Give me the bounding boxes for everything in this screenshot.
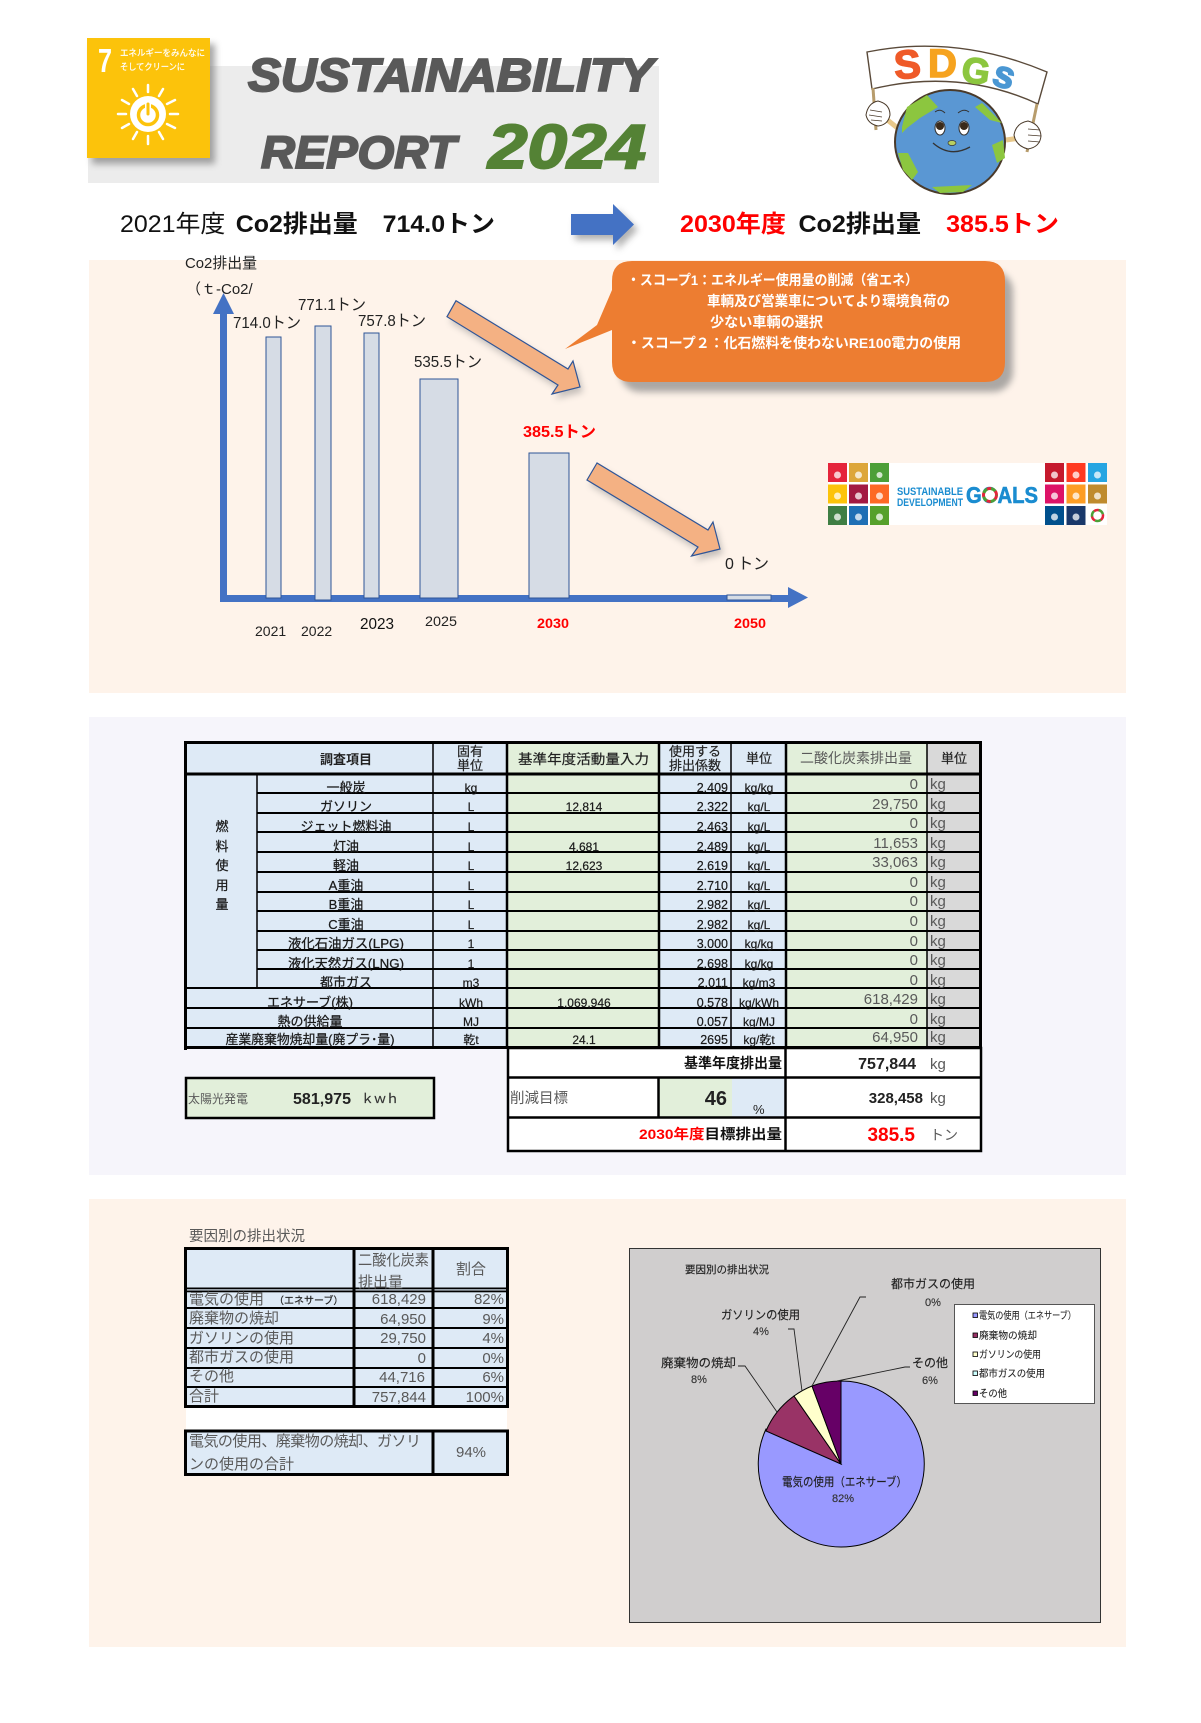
emission factors: 2.489 — [697, 840, 728, 854]
table: emissions by source — [186, 1248, 508, 1406]
item names: ガソリン — [320, 799, 372, 814]
panel: emissions calculation table — [89, 717, 1126, 1175]
pie chart: ガソリンの使用 — [721, 1307, 800, 1322]
emission factors: 2.710 — [697, 879, 728, 893]
CO2 emission values: 0 — [910, 913, 918, 930]
title: year 2024: 2024 — [487, 113, 646, 182]
legend: 電気の使用（エネサーブ） — [979, 1309, 1076, 1322]
table: totals and reduction target: 2030年度 目標排出量 — [639, 1126, 782, 1142]
table: emissions by source: 都市ガスの使用 — [189, 1349, 294, 1366]
icon: SDGs earth mascot: G — [959, 48, 993, 93]
CO2 units: kg — [930, 991, 946, 1008]
factor units: kg/MJ — [743, 1015, 775, 1029]
activity inputs: 24.1 — [572, 1033, 596, 1047]
row group label: fuel use: 用 — [215, 878, 229, 893]
pie chart: 4% — [753, 1326, 769, 1338]
item names: A重油 — [329, 878, 363, 893]
CO2 emission values: 0 — [910, 815, 918, 832]
factor units: kg/乾t — [743, 1033, 775, 1047]
table: emissions by source: 合計 — [189, 1388, 219, 1405]
icon: SDG goal 7 card: そしてクリーンに — [120, 62, 185, 72]
table header row: 排出係数 — [669, 758, 721, 773]
activity inputs: 12,814 — [566, 800, 603, 814]
table: totals and reduction target: kg — [930, 1056, 946, 1073]
activity inputs: 12,623 — [566, 859, 603, 873]
CO2 units: kg — [930, 972, 946, 989]
pie chart: 82% — [832, 1493, 854, 1505]
CO2 units — [930, 776, 946, 1046]
bar chart — [213, 293, 808, 639]
CO2 units: kg — [930, 933, 946, 950]
factor units: kg/L — [748, 840, 771, 854]
item names: エネサーブ(株) — [267, 995, 353, 1010]
table: top three sources total: 電気の使用、廃棄物の焼却、ガソリ — [189, 1433, 421, 1450]
table: emissions by source: 割合 — [456, 1261, 486, 1278]
chart panel: pie chart of emission sources — [630, 1248, 1100, 1622]
CO2 units: kg — [930, 913, 946, 930]
CO2 emission values: 0 — [910, 1011, 918, 1028]
emission factors: 2.409 — [697, 781, 728, 795]
legend: 廃棄物の焼却 — [979, 1329, 1037, 1342]
item names: 灯油 — [333, 839, 359, 854]
legend: その他 — [979, 1387, 1007, 1400]
table: emissions by source: その他 — [189, 1368, 234, 1385]
unit column: L — [468, 859, 475, 873]
item names: 都市ガス — [320, 975, 372, 990]
unit column: kg — [465, 781, 477, 795]
emission factors: 2.322 — [697, 800, 728, 814]
CO2 units: kg — [930, 952, 946, 969]
icon: Sustainable Development Goals logo: GOALS — [966, 482, 1038, 508]
unit column: 乾t — [463, 1033, 479, 1047]
axis title — [185, 255, 257, 298]
table header row: 二酸化炭素排出量 — [800, 750, 912, 766]
CO2 emission values: 33,063 — [872, 854, 918, 871]
table: emissions by source: 排出量 — [358, 1274, 403, 1291]
CO2 emission values: 0 — [910, 933, 918, 950]
factor units: kg/kg — [745, 781, 773, 795]
CO2 units: kg — [930, 835, 946, 852]
callout: scope 1 and 2 measures — [565, 261, 1013, 392]
pie chart: 廃棄物の焼却 — [661, 1356, 736, 1370]
factor units: kg/L — [748, 820, 771, 834]
table: emissions by source: 電気の使用 — [189, 1291, 264, 1308]
activity inputs — [557, 800, 611, 1047]
bar chart: 385.5トン — [523, 424, 596, 441]
header banner: report title — [88, 49, 659, 183]
callout: solar generation — [186, 1078, 434, 1118]
item names: 軽油 — [333, 858, 359, 873]
unit column: L — [468, 898, 475, 912]
factor units: kg/kg — [745, 937, 773, 951]
table header row: 単位 — [746, 751, 772, 766]
chart panel: pie chart of emission sources: 要因別の排出状況 — [685, 1263, 769, 1276]
pie chart — [661, 1276, 975, 1547]
icon: Sustainable Development Goals logo: DEVELOPMENT — [897, 497, 963, 509]
table header row: 調査項目 — [320, 752, 372, 767]
unit column: MJ — [463, 1015, 479, 1029]
unit column: L — [468, 800, 475, 814]
bar chart: 771.1トン — [298, 297, 366, 314]
unit column: L — [468, 820, 475, 834]
CO2 emission values: 0 — [910, 874, 918, 891]
bar chart: 2050 — [734, 615, 766, 631]
emission factors: 0.578 — [697, 996, 728, 1010]
table header row: 単位 — [941, 751, 967, 766]
pie chart: 電気の使用（エネサーブ） — [782, 1474, 907, 1489]
table: totals and reduction target: トン — [930, 1127, 958, 1143]
table: emissions by source: 757,844 — [372, 1389, 426, 1406]
unit column: kWh — [459, 996, 483, 1010]
unit column — [459, 781, 483, 1047]
text: 2030 target emissions: 2030年度 Co2排出量 385.5トン — [680, 211, 1059, 238]
icon: SDGs earth mascot: D — [928, 42, 957, 86]
table: totals and reduction target: 328,458 — [869, 1090, 923, 1107]
bar chart: 2030 — [537, 615, 569, 631]
table: top three sources total: ンの使用の合計 — [189, 1456, 294, 1473]
callout: scope 1 and 2 measures: ・スコープ２：化石燃料を使わないRE100電力の使用 — [627, 335, 961, 351]
icon: SDGs earth mascot: s — [988, 52, 1021, 99]
item names: 産業廃棄物焼却量(廃プラ･量) — [226, 1032, 394, 1047]
icon: SDGs earth mascot — [866, 42, 1047, 194]
panel: emissions by source — [89, 1199, 1126, 1647]
emission factors: 2.619 — [697, 859, 728, 873]
emission factors: 2.698 — [697, 957, 728, 971]
row group label: fuel use: 使 — [215, 858, 229, 873]
bar chart: 2022 — [301, 623, 332, 639]
emission factors: 2.011 — [698, 976, 728, 990]
CO2 emission values: 29,750 — [872, 796, 918, 813]
icon: SDGs earth mascot: S — [893, 42, 922, 88]
callout: scope 1 and 2 measures: ・スコープ1：エネルギー使用量の削減（省エネ） — [627, 272, 918, 288]
item names — [226, 780, 404, 1047]
CO2 units: kg — [930, 796, 946, 813]
CO2 emission values: 0 — [910, 972, 918, 989]
heading: emissions by source: 要因別の排出状況 — [189, 1228, 305, 1245]
factor units: kg/kWh — [739, 996, 779, 1010]
table header row — [320, 744, 967, 773]
factor units: kg/m3 — [743, 976, 776, 990]
table header row: 使用する — [669, 744, 721, 759]
row group label: fuel use — [215, 819, 229, 912]
bar chart: 2021 — [255, 623, 286, 639]
item names: 液化天然ガス(LNG) — [288, 956, 404, 971]
arrow: decline to 2030 — [447, 301, 583, 399]
table: emissions by source: 100% — [466, 1389, 504, 1406]
table: emissions by source: 6% — [482, 1369, 504, 1386]
table: totals and reduction target: 削減目標 — [510, 1090, 568, 1107]
table: top three sources total: 94% — [456, 1444, 486, 1461]
axis title: （ｔ-Co2/ — [186, 281, 254, 298]
pie chart: 0% — [925, 1297, 941, 1309]
unit column: m3 — [463, 976, 480, 990]
row group label: fuel use: 料 — [215, 839, 229, 854]
item names: ジェット燃料油 — [300, 819, 392, 834]
icon: Sustainable Development Goals logo — [828, 463, 1107, 525]
activity inputs: 4,681 — [569, 840, 599, 854]
legend: 都市ガスの使用 — [979, 1367, 1045, 1380]
item names: B重油 — [329, 897, 363, 912]
table: emissions by source: 9% — [482, 1311, 504, 1328]
icon: SDG goal 7 card: エネルギーをみんなに — [120, 48, 205, 58]
pie chart: その他 — [912, 1356, 948, 1370]
unit column: L — [468, 879, 475, 893]
table header row: 基準年度活動量入力 — [518, 751, 649, 767]
item names: C重油 — [328, 917, 364, 932]
legend — [954, 1304, 1094, 1404]
legend: ガソリンの使用 — [979, 1348, 1041, 1361]
panel: emissions reduction chart — [89, 255, 1126, 693]
emission factors: 0.057 — [697, 1015, 728, 1029]
table: emissions by source: 29,750 — [380, 1330, 426, 1347]
table header row: 固有 — [457, 744, 483, 759]
bar chart: 2025 — [425, 613, 457, 629]
title: sustainability: SUSTAINABILITY — [248, 49, 658, 101]
bar chart: 0 トン — [725, 556, 769, 573]
factor units: kg/kg — [745, 957, 773, 971]
emission factors: 2.463 — [697, 820, 728, 834]
item names: 液化石油ガス(LPG) — [288, 936, 404, 951]
icon: Sustainable Development Goals logo: SUSTAINABLE — [897, 486, 963, 498]
bar chart: 2023 — [360, 616, 394, 633]
CO2 emission values: 64,950 — [872, 1029, 918, 1046]
table: activity and emission factors — [184, 741, 982, 1050]
table: emissions by source: 44,716 — [379, 1369, 425, 1386]
CO2 emission values: 0 — [910, 952, 918, 969]
text: 2021 baseline emissions: 2021年度 Co2排出量 714.0トン — [120, 211, 495, 238]
unit column: L — [468, 840, 475, 854]
emission factors: 2695 — [700, 1033, 728, 1047]
CO2 emission values: 0 — [910, 893, 918, 910]
unit column: L — [468, 918, 475, 932]
factor units: kg/L — [748, 859, 771, 873]
pie chart: 6% — [922, 1375, 938, 1387]
bar chart: 714.0トン — [233, 315, 301, 332]
table: emissions by source: （エネサーブ） — [274, 1294, 343, 1307]
table: emissions by source: 4% — [482, 1330, 504, 1347]
table: top three sources total — [186, 1431, 508, 1475]
factor units: kg/L — [748, 800, 771, 814]
factor units: kg/L — [748, 879, 771, 893]
callout: scope 1 and 2 measures: 車輌及び営業車についてより環境負荷の — [707, 293, 950, 309]
icon: SDG goal 7 card: 7 — [98, 42, 112, 79]
row group label: fuel use: 量 — [215, 897, 229, 912]
emission factors: 2.982 — [697, 898, 728, 912]
axis title: Co2排出量 — [185, 255, 257, 272]
callout: solar generation: 太陽光発電 — [188, 1091, 248, 1106]
table: emissions by source: 82% — [474, 1291, 504, 1308]
emission factors — [697, 781, 728, 1047]
callout: solar generation: 581,975 — [293, 1091, 351, 1108]
row group label: fuel use: 燃 — [215, 819, 229, 834]
table: emissions by source: 廃棄物の焼却 — [189, 1310, 279, 1327]
callout: solar generation: ｋｗｈ — [361, 1091, 399, 1106]
arrow: decline to 2050 — [587, 463, 723, 561]
table: totals and reduction target: 基準年度排出量 — [684, 1055, 782, 1071]
unit column: 1 — [468, 937, 475, 951]
unit column: 1 — [468, 957, 475, 971]
CO2 units: kg — [930, 893, 946, 910]
CO2 units: kg — [930, 854, 946, 871]
callout: scope 1 and 2 measures: 少ない車輌の選択 — [710, 314, 823, 330]
arrow: baseline to target — [571, 204, 638, 250]
table: emissions by source: 二酸化炭素 — [358, 1252, 429, 1269]
CO2 emission values — [864, 776, 918, 1046]
item names: 一般炭 — [326, 780, 366, 795]
bar chart: 535.5トン — [414, 354, 482, 371]
pie chart: 都市ガスの使用 — [891, 1276, 975, 1291]
table: totals and reduction target: kg — [930, 1090, 946, 1107]
CO2 units: kg — [930, 815, 946, 832]
CO2 units: kg — [930, 874, 946, 891]
CO2 emission values: 11,653 — [873, 835, 918, 852]
activity inputs: 1,069,946 — [557, 996, 611, 1010]
factor units — [739, 781, 779, 1047]
table: emissions by source: 0 — [418, 1350, 426, 1367]
icon: SDG goal 7 card — [87, 38, 215, 164]
CO2 units: kg — [930, 1011, 946, 1028]
CO2 units: kg — [930, 776, 946, 793]
CO2 emission values: 0 — [910, 776, 918, 793]
CO2 emission values: 618,429 — [864, 991, 918, 1008]
bar chart: 757.8トン — [358, 313, 426, 330]
pie chart: 8% — [691, 1374, 707, 1386]
CO2 units: kg — [930, 1029, 946, 1046]
table: totals and reduction target: 385.5 — [867, 1125, 915, 1146]
table: emissions by source: 64,950 — [380, 1311, 426, 1328]
emission factors: 3.000 — [697, 937, 728, 951]
factor units: kg/L — [748, 898, 771, 912]
item names: 熱の供給量 — [277, 1014, 343, 1029]
table: totals and reduction target: 46 — [705, 1088, 727, 1110]
title: report: REPORT — [261, 127, 460, 178]
table header row: 単位 — [457, 758, 483, 773]
table: totals and reduction target: 757,844 — [858, 1056, 916, 1073]
emission factors: 2.982 — [697, 918, 728, 932]
table: emissions by source: 618,429 — [372, 1291, 426, 1308]
table: emissions by source: 0% — [482, 1350, 504, 1367]
table: emissions by source: ガソリンの使用 — [189, 1330, 294, 1347]
table: totals and reduction target: % — [753, 1102, 765, 1117]
table: totals and reduction target — [507, 1047, 982, 1151]
factor units: kg/L — [748, 918, 771, 932]
